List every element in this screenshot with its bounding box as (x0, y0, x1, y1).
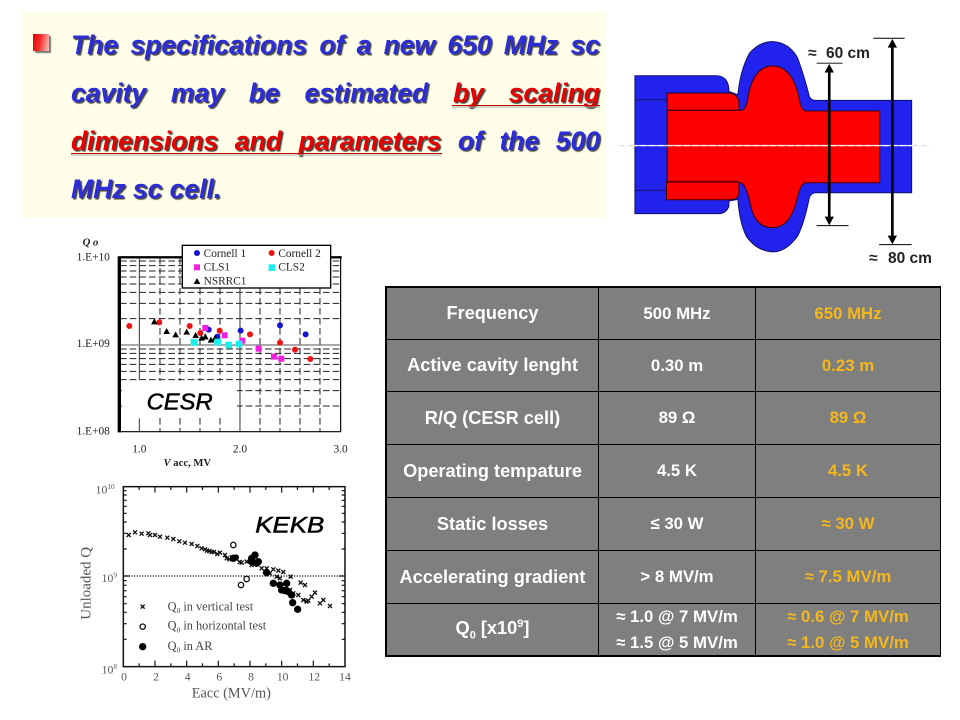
table: cavity parameters: Frequency (446, 303, 538, 323)
table: cavity parameters: 4.5 K (657, 461, 697, 480)
heading text block (71, 30, 602, 204)
axis labels: 6 (216, 671, 222, 684)
axis labels: 10 (96, 483, 107, 496)
legend (139, 599, 267, 655)
table: cavity parameters: ≈ 0.6 @ 7 MV/m (787, 606, 909, 626)
table: cavity parameters: Static losses (437, 514, 548, 534)
label: KEKB: KEKB (255, 513, 324, 538)
diagram: cavity cross-section: ≈ (869, 250, 878, 267)
legend: 0 (177, 606, 181, 615)
series: Cornell 2 (126, 319, 313, 362)
diagram: cavity cross-section: 60 cm (826, 45, 870, 62)
axis labels: 14 (339, 671, 351, 684)
axis labels: 0 (121, 671, 127, 684)
table: cavity parameters: ≈ 1.0 @ 5 MV/m (787, 632, 909, 652)
table: cavity parameters: 4.5 K (828, 461, 868, 480)
axis labels: Eacc (MV/m) (192, 686, 271, 702)
table: cavity parameters: 0.30 m (651, 356, 703, 374)
axis labels: 1.E+09 (77, 338, 110, 350)
axis labels: 10 (102, 663, 113, 676)
heading text block: The specifications of a new 650 MHz sc (71, 30, 600, 60)
axis labels: 10 (102, 572, 113, 585)
legend: 0 (177, 625, 181, 634)
table: cavity parameters: Q0 [x109] (456, 618, 529, 641)
diagram: cavity cross-section: ≈ (808, 45, 817, 62)
table: cavity parameters (385, 286, 941, 657)
legend: Cornell 2 (278, 248, 321, 260)
axis labels: 10 (277, 671, 289, 684)
axis labels: 2 (153, 671, 159, 684)
axis labels: 12 (308, 671, 320, 684)
series: CLS1 (202, 325, 284, 362)
legend: CLS2 (278, 262, 305, 274)
legend: in AR (180, 639, 213, 653)
table: cavity parameters: 500 MHz (643, 304, 711, 322)
legend (182, 245, 331, 288)
legend: Q (168, 619, 177, 633)
table: cavity parameters: > 8 MV/m (640, 567, 714, 586)
heading text block: MHz sc cell. (71, 174, 221, 204)
legend: CLS1 (204, 262, 230, 274)
axis labels (79, 482, 351, 702)
axis labels: 1.E+10 (77, 252, 110, 264)
legend: in vertical test (180, 599, 254, 613)
table: cavity parameters: 650 MHz (814, 304, 882, 322)
panel: headline background (22, 12, 606, 218)
table: cavity parameters: ≤ 30 W (650, 514, 704, 533)
series: horizontal test circles (231, 542, 249, 588)
series: vertical test crosses (127, 530, 332, 608)
axis labels: 9 (113, 571, 117, 580)
axis labels: 2.0 (233, 444, 247, 456)
axis labels: 3.0 (334, 444, 348, 456)
table: cavity parameters: Operating tempature (403, 460, 582, 480)
legend: Q (168, 599, 177, 613)
diagram: cavity cross-section: 80 cm (888, 250, 932, 267)
table: cavity parameters: 89 Ω (659, 408, 695, 427)
table: cavity parameters: R/Q (CESR cell) (425, 408, 560, 428)
label: CESR: CESR (147, 388, 213, 414)
axis labels: Unloaded Q (79, 547, 95, 620)
axis labels (77, 237, 348, 469)
legend: Q (168, 639, 177, 653)
axis labels: Q o (83, 237, 98, 248)
table: cavity parameters: Accelerating gradient (400, 566, 585, 586)
series: NSRRC1 (151, 318, 218, 343)
legend: 0 (177, 646, 181, 655)
axis labels: 8 (248, 671, 254, 684)
table: cavity parameters: 89 Ω (830, 408, 866, 427)
axis labels: 4 (185, 671, 191, 684)
series: CLS2 (191, 339, 242, 348)
icon: red square bullet (33, 34, 49, 51)
table: cavity parameters: ≈ 1.5 @ 5 MV/m (616, 632, 738, 652)
series: AR filled circles (230, 551, 301, 613)
axis labels: 8 (113, 662, 117, 671)
legend: in horizontal test (180, 619, 267, 633)
axis labels: 10 (107, 482, 115, 491)
table: cavity parameters: ≈ 7.5 MV/m (805, 567, 891, 586)
heading text block: dimensions and parameters of the 500 (71, 126, 600, 156)
legend: Cornell 1 (204, 248, 246, 260)
axis labels: V acc, MV (163, 458, 211, 469)
table: cavity parameters: ≈ 1.0 @ 7 MV/m (616, 606, 738, 626)
axis labels: 1.0 (132, 444, 147, 456)
axis labels: 1.E+08 (77, 425, 110, 437)
table: cavity parameters: Active cavity lenght (407, 355, 578, 375)
series: Cornell 1 (206, 322, 309, 340)
table: cavity parameters: ≈ 30 W (821, 514, 875, 533)
legend: NSRRC1 (204, 275, 246, 287)
heading text block: cavity may be estimated by scaling (71, 78, 600, 108)
table: cavity parameters: 0.23 m (822, 356, 874, 374)
